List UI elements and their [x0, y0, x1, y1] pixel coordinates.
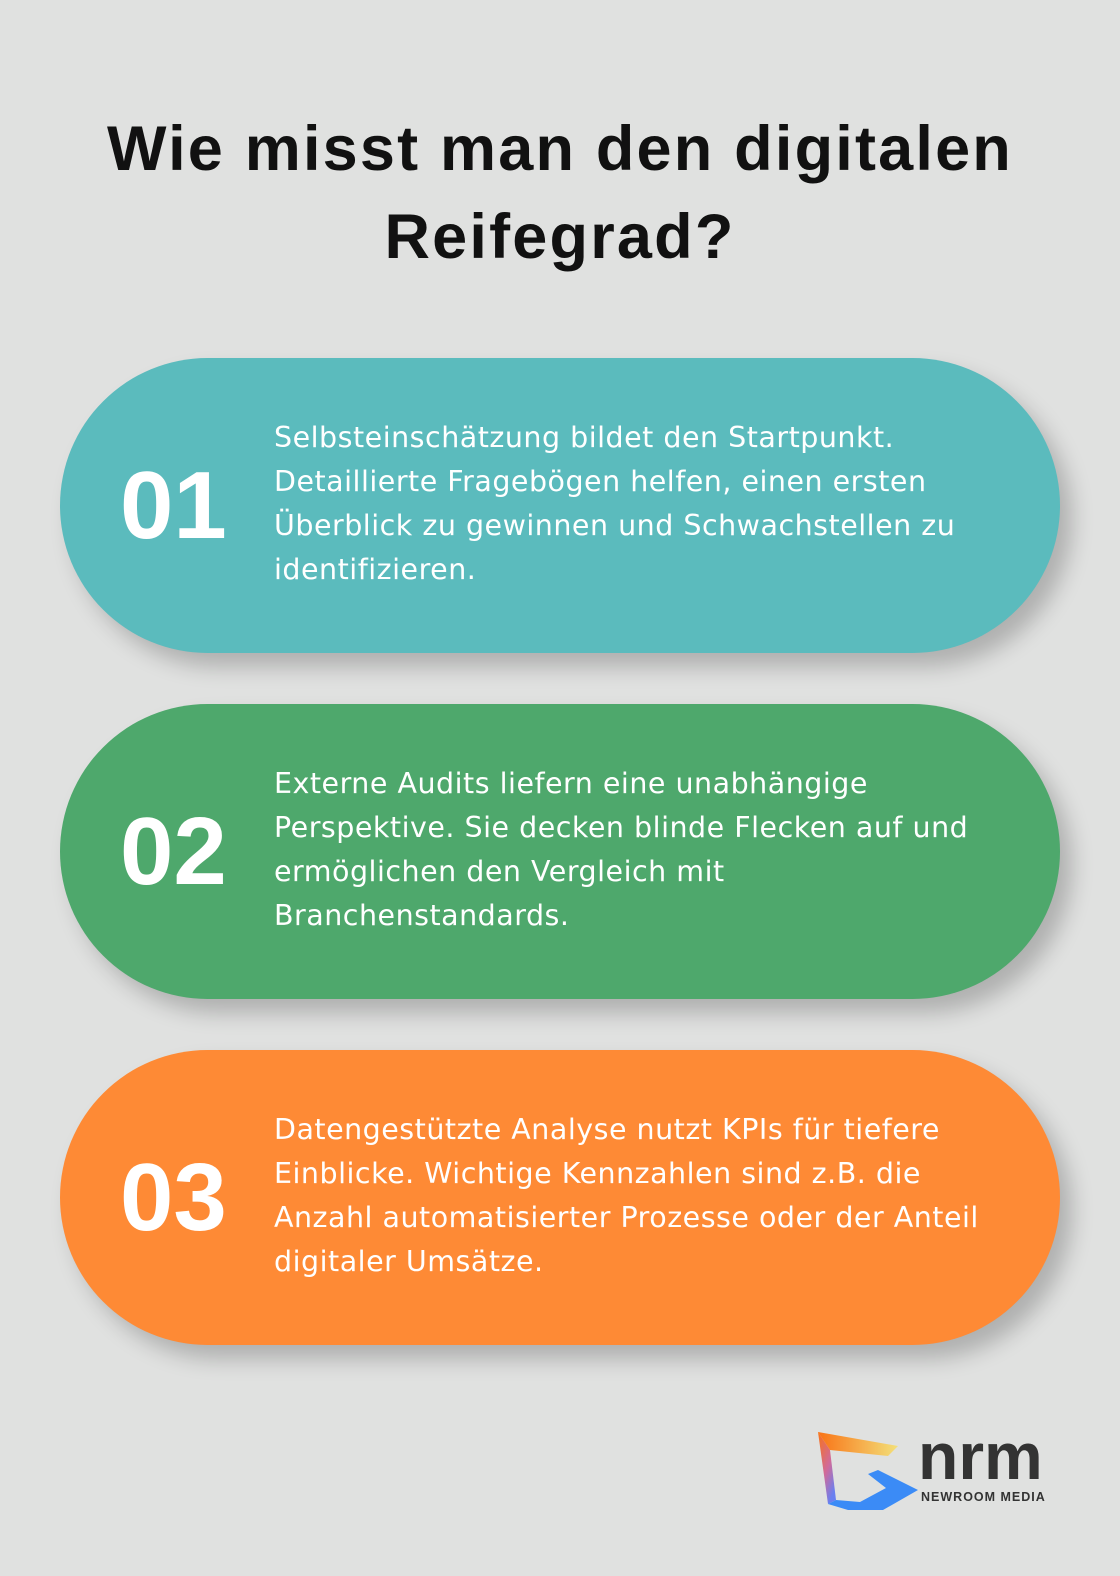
text 02 [274, 767, 968, 932]
text 01: Selbsteinschätzung bildet den Startpunkt. [274, 421, 894, 454]
panel: step 02 [60, 704, 1060, 999]
text 01: Detaillierte Fragebögen helfen, einen ersten [274, 465, 927, 498]
text 02: Perspektive. Sie decken blinde Flecken auf und [274, 811, 968, 844]
brand subtitle: NEWROOM MEDIA [921, 1490, 1046, 1504]
panel: step 03 [60, 1050, 1060, 1345]
text 03: Datengestützte Analyse nutzt KPIs für tiefere [274, 1113, 940, 1146]
number 02: 02 [120, 798, 227, 905]
text 01: identifizieren. [274, 553, 476, 586]
number 03: 03 [120, 1144, 227, 1251]
text 03: digitaler Umsätze. [274, 1245, 544, 1278]
text 01: Überblick zu gewinnen und Schwachstellen zu [274, 509, 955, 542]
number 01: 01 [120, 452, 227, 559]
brand name: nrm [918, 1419, 1043, 1493]
text 01 [274, 421, 955, 586]
text 03 [274, 1113, 979, 1278]
text 02: Externe Audits liefern eine unabhängige [274, 767, 868, 800]
text 02: Branchenstandards. [274, 899, 569, 932]
text 02: ermöglichen den Vergleich mit [274, 855, 725, 888]
title [107, 114, 1013, 272]
logo [818, 1419, 1046, 1510]
text 03: Einblicke. Wichtige Kennzahlen sind z.B. die [274, 1157, 921, 1190]
title: Wie misst man den digitalen [107, 114, 1013, 184]
icon: logo mark [818, 1432, 918, 1510]
panel: step 01 [60, 358, 1060, 653]
text 03: Anzahl automatisierter Prozesse oder der Anteil [274, 1201, 979, 1234]
title: Reifegrad? [384, 202, 736, 272]
